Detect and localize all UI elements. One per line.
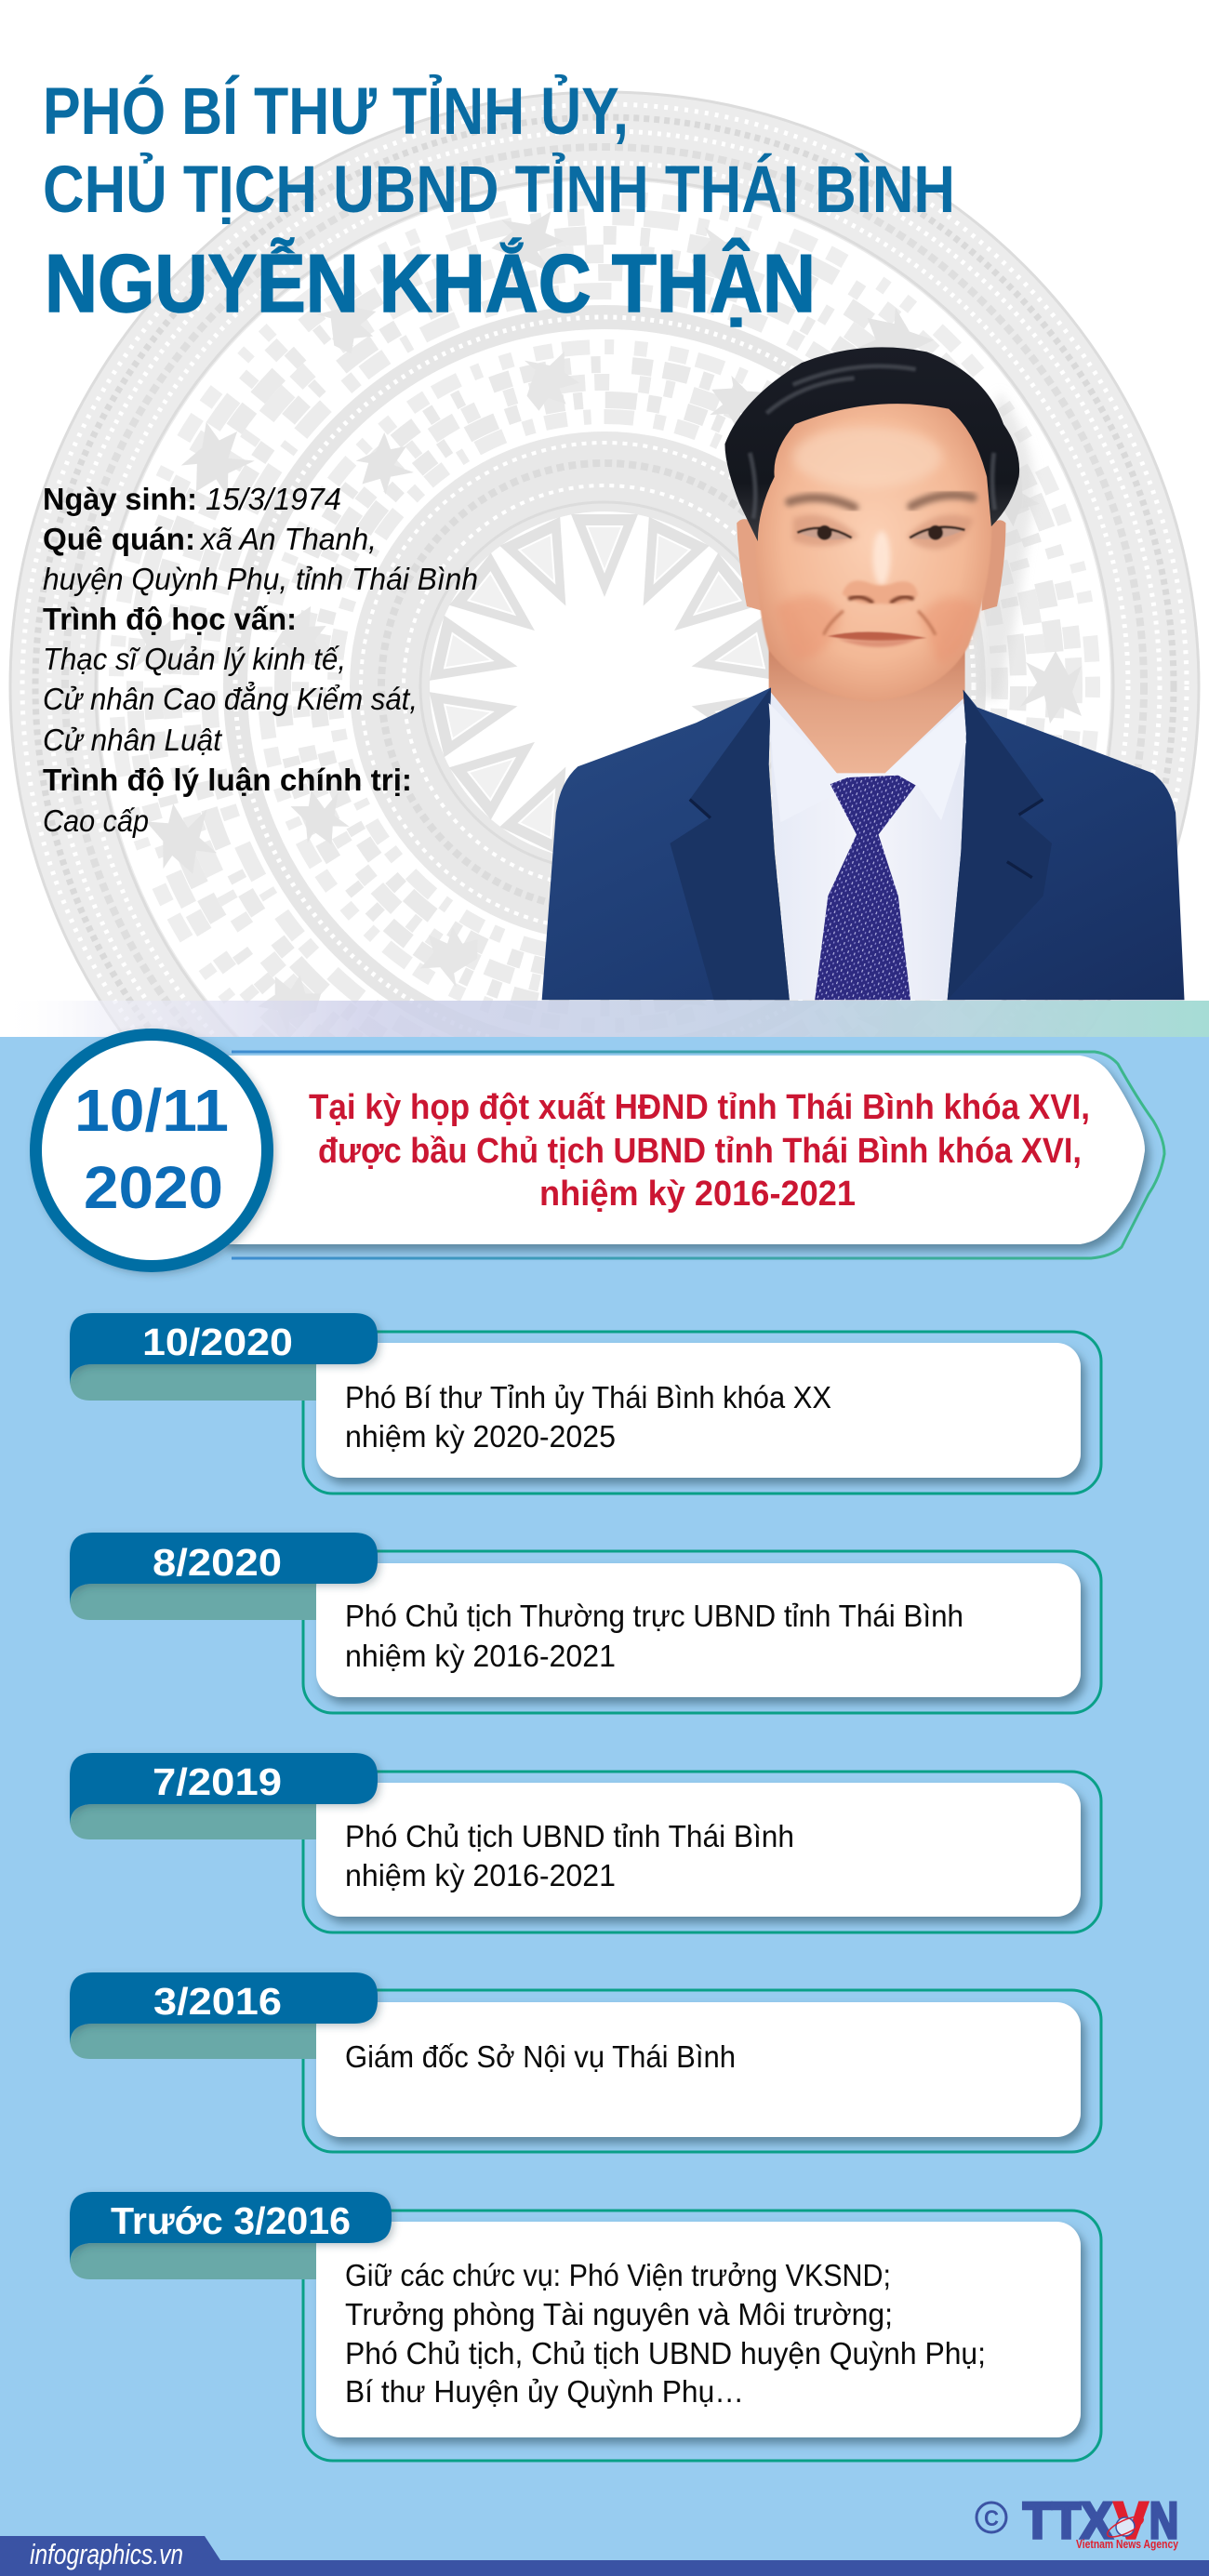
title: PHÓ BÍ THƯ TỈNH ỦY,	[43, 74, 629, 149]
logo: copyright mark	[976, 2503, 1006, 2532]
portrait: cheek tones	[776, 595, 977, 663]
personal information text block	[43, 482, 478, 838]
timeline card: 7/2019: 7/2019	[153, 1760, 282, 1803]
personal information text block: Cao cấp	[43, 803, 149, 838]
portrait: eye sockets	[793, 514, 973, 550]
personal information text block: Trình độ lý luận chính trị:	[43, 763, 412, 797]
timeline card: Trước 3/2016: Phó Chủ tịch, Chủ tịch UBND huyện Quỳnh Phụ;	[345, 2336, 986, 2370]
featured panel: red headline: nhiệm kỳ 2016-2021	[539, 1175, 856, 1214]
personal information text block: Cử nhân Cao đẳng Kiểm sát,	[43, 682, 418, 716]
timeline card: 7/2019	[70, 1753, 1101, 1932]
timeline card: 3/2016: 3/2016	[153, 1980, 282, 2023]
timeline card: Trước 3/2016: Bí thư Huyện ủy Quỳnh Phụ…	[345, 2374, 744, 2409]
personal information text block: huyện Quỳnh Phụ, tỉnh Thái Bình	[43, 562, 478, 596]
personal information text block: Thạc sĩ Quản lý kinh tế,	[43, 642, 346, 676]
title: CHỦ TỊCH UBND TỈNH THÁI BÌNH	[43, 153, 955, 227]
featured panel: date circle: 2020	[84, 1154, 223, 1221]
portrait: face	[755, 387, 991, 702]
bronze drum background pattern	[10, 92, 1199, 1281]
portrait: suit jacket	[542, 687, 1185, 1000]
timeline card: 10/2020	[70, 1313, 1101, 1494]
personal information text block: Cử nhân Luật	[43, 723, 223, 757]
portrait: shirt	[769, 690, 966, 1000]
personal information text block: Quê quán:	[43, 522, 195, 556]
timeline card: 3/2016	[70, 1972, 1101, 2152]
TTXVN logo	[976, 2491, 1178, 2551]
timeline card: 7/2019: nhiệm kỳ 2016-2021	[345, 1858, 616, 1892]
timeline card: 3/2016: Giám đốc Sở Nội vụ Thái Bình	[345, 2039, 736, 2074]
timeline card: Trước 3/2016: Trưởng phòng Tài nguyên và Môi trường;	[345, 2297, 893, 2331]
portrait: forehead light	[793, 427, 942, 488]
portrait: nose highlight	[872, 531, 890, 585]
featured panel: red headline: Tại kỳ họp đột xuất HĐND tỉnh Thái Bình khóa XVI,	[309, 1088, 1090, 1127]
gradient transition band	[0, 1001, 1209, 1038]
timeline card: 10/2020: 10/2020	[142, 1321, 293, 1363]
title: NGUYỄN KHẮC THẬN	[45, 237, 816, 329]
personal information text block: Trình độ học vấn:	[43, 602, 297, 636]
timeline card: 10/2020: nhiệm kỳ 2020-2025	[345, 1419, 616, 1454]
portrait: mouth	[827, 631, 927, 641]
portrait: right eye	[910, 525, 965, 540]
logo: TTXVN wordmark: N	[1149, 2491, 1178, 2549]
timeline card: 8/2020: Phó Chủ tịch Thường trực UBND tỉnh Thái Bình	[345, 1599, 963, 1633]
portrait: hair graying	[750, 366, 995, 519]
timeline card: 7/2019: Phó Chủ tịch UBND tỉnh Thái Bình	[345, 1819, 794, 1853]
logo: TTXVN wordmark: TTX	[1023, 2491, 1112, 2549]
footer: site name: infographics.vn	[30, 2538, 183, 2570]
portrait: soft halo	[977, 392, 1034, 698]
portrait: left lapel	[670, 687, 790, 1000]
featured panel: date circle	[35, 1034, 268, 1267]
portrait: nose	[842, 580, 918, 604]
logo: Vietnam News Agency: Vietnam News Agency	[1076, 2538, 1178, 2551]
featured panel: white arrow card	[223, 1056, 1145, 1244]
portrait: right lapel	[948, 690, 1052, 1000]
portrait: lapel notches	[690, 800, 1043, 878]
logo: TTXVN wordmark	[1023, 2491, 1178, 2549]
featured panel: date circle: 10/11	[74, 1077, 229, 1144]
portrait: right ear	[981, 520, 1005, 611]
featured panel: red headline: được bầu Chủ tịch UBND tỉnh Thái Bình khóa XVI,	[318, 1132, 1082, 1171]
logo: TTXVN wordmark: V	[1114, 2491, 1148, 2549]
timeline card: Trước 3/2016: Trước 3/2016	[111, 2199, 351, 2242]
portrait: left eye	[797, 525, 852, 540]
timeline card: Trước 3/2016	[70, 2192, 1101, 2461]
timeline card: 8/2020: 8/2020	[153, 1541, 282, 1584]
portrait: hair	[724, 347, 1019, 541]
logo: globe	[1105, 2513, 1146, 2541]
title	[43, 74, 955, 329]
logo: copyright mark: C	[984, 2506, 999, 2531]
timeline card: 8/2020	[70, 1533, 1101, 1713]
portrait: smile folds	[824, 611, 936, 635]
featured panel: outline	[232, 1052, 1164, 1258]
portrait: collar right	[885, 703, 966, 820]
portrait: eyebrows	[790, 495, 973, 507]
personal information text block: Ngày sinh:	[43, 482, 197, 516]
featured panel: red headline	[309, 1088, 1090, 1214]
portrait: left ear	[737, 519, 763, 611]
timeline card: 8/2020: nhiệm kỳ 2016-2021	[345, 1639, 616, 1673]
portrait: collar left	[769, 703, 850, 822]
footer bar	[0, 2536, 1209, 2576]
featured event panel	[35, 1034, 1164, 1267]
personal information text block: 15/3/1974	[206, 482, 341, 516]
blue lower panel background	[0, 1037, 1209, 2576]
timeline card: Trước 3/2016: Giữ các chức vụ: Phó Viện trưởng VKSND;	[345, 2258, 891, 2292]
personal information text block: xã An Thanh,	[199, 522, 377, 556]
portrait	[542, 347, 1185, 1000]
timeline card: 10/2020: Phó Bí thư Tỉnh ủy Thái Bình khóa XX	[345, 1380, 831, 1414]
portrait: tie	[815, 776, 916, 1000]
portrait: neck	[769, 642, 965, 777]
